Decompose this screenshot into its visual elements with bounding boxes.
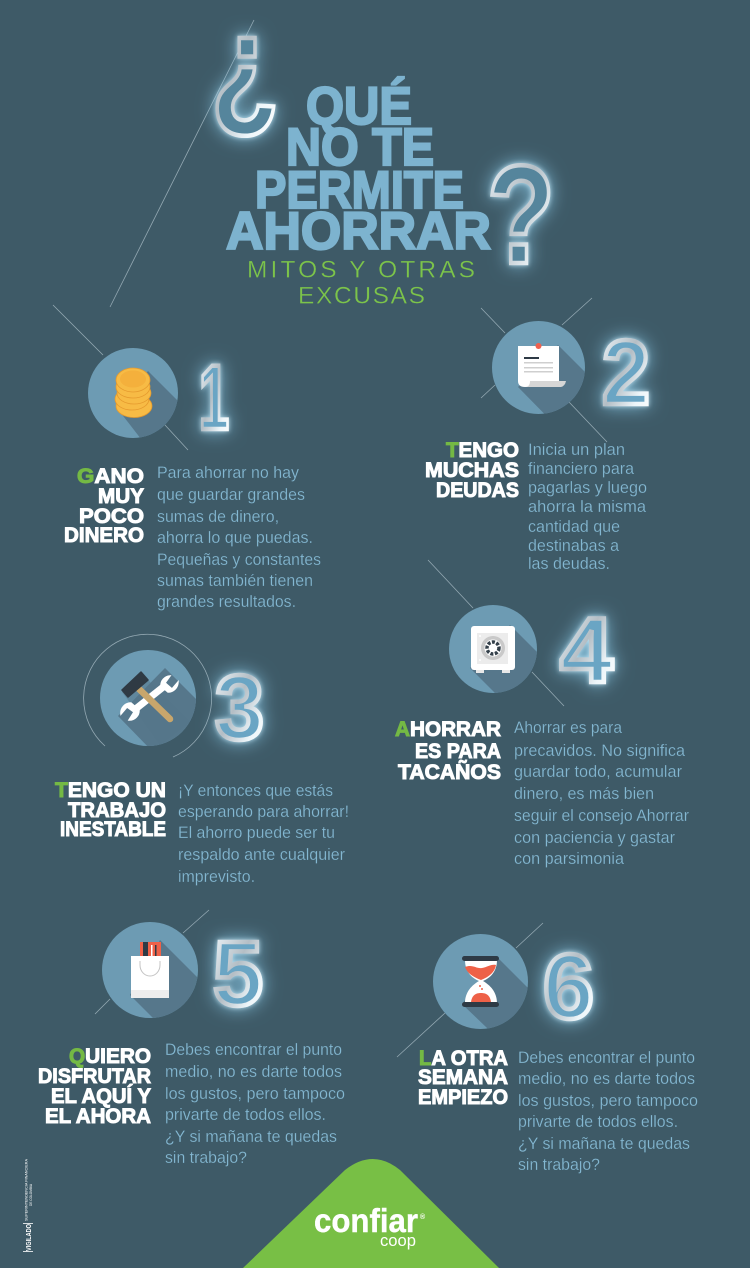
- heading: Quiero disfrutar el aquí y el ahora: [38, 1045, 151, 1128]
- title: main heading: QUÉ: [306, 76, 412, 136]
- panel: item 3: [55, 634, 349, 886]
- logo: confiar coop: coop: [380, 1231, 416, 1250]
- body text 6: Debes encontrar el punto: [518, 1049, 695, 1067]
- vertical legal note: DE COLOMBIA: [28, 1184, 33, 1206]
- title block: [211, 0, 555, 310]
- body text 5: sin trabajo?: [165, 1149, 247, 1167]
- body text 2: cantidad que: [528, 518, 620, 536]
- body text 1: ahorra lo que puedas.: [157, 529, 313, 547]
- heading: La otra semana empiezo: [418, 1047, 508, 1109]
- title: main heading: [226, 76, 491, 261]
- subtitle: [247, 256, 475, 310]
- icon: closing question mark: ?: [487, 136, 555, 293]
- body text 1: grandes resultados.: [157, 593, 296, 611]
- body text 2: ahorra la misma: [528, 498, 647, 516]
- panel: item 1: [53, 305, 321, 611]
- body text 6: [518, 1049, 698, 1174]
- icon: coins: [88, 348, 178, 438]
- body text 1: Para ahorrar no hay: [157, 464, 300, 482]
- heading: Quiero disfrutar el aquí y el ahora: QUIERO: [69, 1045, 151, 1068]
- body text 6: medio, no es darte todos: [518, 1070, 695, 1088]
- body text 1: sumas también tienen: [157, 572, 313, 590]
- body text 5: privarte de todos ellos.: [165, 1106, 326, 1124]
- heading: Quiero disfrutar el aquí y el ahora: DISFRUTAR: [38, 1065, 151, 1088]
- body text 4: con parsimonia: [514, 850, 625, 868]
- logo: confiar coop: ®: [420, 1213, 426, 1221]
- heading: Gano muy poco dinero: GANO: [77, 465, 144, 488]
- heading: Tengo muchas deudas: [425, 439, 519, 502]
- body text 4: con paciencia y gastar: [514, 829, 675, 847]
- panel: item 4: [395, 560, 689, 868]
- body text 4: dinero, es más bien: [514, 785, 654, 803]
- panel: item 6: [397, 923, 698, 1174]
- body text 3: imprevisto.: [178, 868, 255, 886]
- body text 2: [528, 441, 647, 573]
- subtitle: EXCUSAS: [298, 282, 425, 310]
- body text 5: [165, 1041, 345, 1167]
- heading: Ahorrar es para tacaños: AHORRAR: [395, 718, 501, 741]
- body text 4: seguir el consejo Ahorrar: [514, 807, 689, 825]
- heading: Tengo un trabajo inestable: TENGO UN: [55, 779, 166, 802]
- heading: La otra semana empiezo: LA OTRA: [419, 1047, 508, 1070]
- panel: item 5: [38, 910, 345, 1167]
- heading: Gano muy poco dinero: MUY: [98, 485, 144, 508]
- body text 3: El ahorro puede ser tu: [178, 824, 335, 842]
- body text 4: guardar todo, acumular: [514, 763, 682, 781]
- subtitle: MITOS Y OTRAS: [247, 256, 475, 284]
- body text 3: ¡Y entonces que estás: [178, 782, 333, 800]
- body text 1: sumas de dinero,: [157, 508, 279, 526]
- body text 6: privarte de todos ellos.: [518, 1113, 678, 1131]
- heading: Gano muy poco dinero: DINERO: [64, 524, 144, 547]
- heading: Tengo un trabajo inestable: [55, 779, 166, 841]
- body text 3: respaldo ante cualquier: [178, 846, 345, 864]
- title: main heading: NO TE: [286, 118, 434, 177]
- heading: Gano muy poco dinero: [64, 465, 144, 547]
- icon: hourglass: [433, 934, 528, 1029]
- footer: green logo shape: [243, 1159, 499, 1268]
- body text 4: [514, 719, 689, 868]
- body text 4: precavidos. No significa: [514, 742, 686, 760]
- heading: Tengo muchas deudas: DEUDAS: [436, 479, 519, 502]
- number 6: 6: [543, 936, 594, 1038]
- number 2: 2: [602, 322, 650, 424]
- body text 6: ¿Y si mañana te quedas: [518, 1135, 690, 1153]
- number 4: 4: [560, 600, 613, 702]
- body text 1: que guardar grandes: [157, 486, 305, 504]
- heading: Ahorrar es para tacaños: ES PARA: [415, 740, 501, 763]
- body text 1: [157, 464, 321, 611]
- vertical legal note: VIGILADO: [24, 1224, 33, 1251]
- body text 2: las deudas.: [528, 555, 610, 573]
- body text 5: ¿Y si mañana te quedas: [165, 1128, 337, 1146]
- body text 3: [178, 782, 349, 886]
- heading: Ahorrar es para tacaños: [395, 718, 501, 784]
- decorative line: title: [110, 20, 254, 307]
- vertical legal note: SUPERINTENDENCIA FINANCIERA: [24, 1159, 28, 1221]
- body text 5: medio, no es darte todos: [165, 1063, 342, 1081]
- title: main heading: PERMITE: [255, 161, 464, 220]
- heading: Tengo un trabajo inestable: TRABAJO: [68, 799, 166, 822]
- body text 3: esperando para ahorrar!: [178, 803, 349, 821]
- heading: La otra semana empiezo: SEMANA: [418, 1066, 508, 1089]
- icon: paper note: [492, 321, 585, 414]
- title: main heading: AHORRAR: [226, 202, 491, 261]
- number 1: 1: [199, 347, 229, 449]
- body text 2: destinabas a: [528, 537, 620, 555]
- heading: Quiero disfrutar el aquí y el ahora: EL AQUÍ Y: [51, 1085, 151, 1108]
- heading: La otra semana empiezo: EMPIEZO: [418, 1086, 508, 1109]
- body text 4: Ahorrar es para: [514, 719, 623, 737]
- heading: Tengo un trabajo inestable: INESTABLE: [60, 818, 166, 841]
- number 5: 5: [213, 923, 263, 1025]
- number 3: 3: [215, 657, 264, 759]
- body text 6: sin trabajo?: [518, 1156, 600, 1174]
- logo: confiar coop: confiar: [314, 1202, 418, 1239]
- body text 2: financiero para: [528, 460, 635, 478]
- heading: Ahorrar es para tacaños: TACAÑOS: [398, 761, 501, 784]
- body text 2: pagarlas y luego: [528, 479, 647, 497]
- body text 2: Inicia un plan: [528, 441, 625, 459]
- icon: tools: [100, 650, 196, 746]
- icon: shopping bag: [102, 922, 198, 1018]
- heading: Tengo muchas deudas: TENGO: [446, 439, 519, 462]
- heading: Quiero disfrutar el aquí y el ahora: EL AHORA: [45, 1105, 151, 1128]
- heading: Tengo muchas deudas: MUCHAS: [425, 459, 519, 482]
- body text 5: los gustos, pero tampoco: [165, 1085, 345, 1103]
- vertical legal note: [23, 1159, 33, 1252]
- panel: item 2: [425, 298, 650, 573]
- body text 6: los gustos, pero tampoco: [518, 1092, 698, 1110]
- body text 1: Pequeñas y constantes: [157, 551, 321, 569]
- icon: safe: [449, 605, 537, 693]
- heading: Gano muy poco dinero: POCO: [79, 505, 144, 528]
- body text 5: Debes encontrar el punto: [165, 1041, 342, 1059]
